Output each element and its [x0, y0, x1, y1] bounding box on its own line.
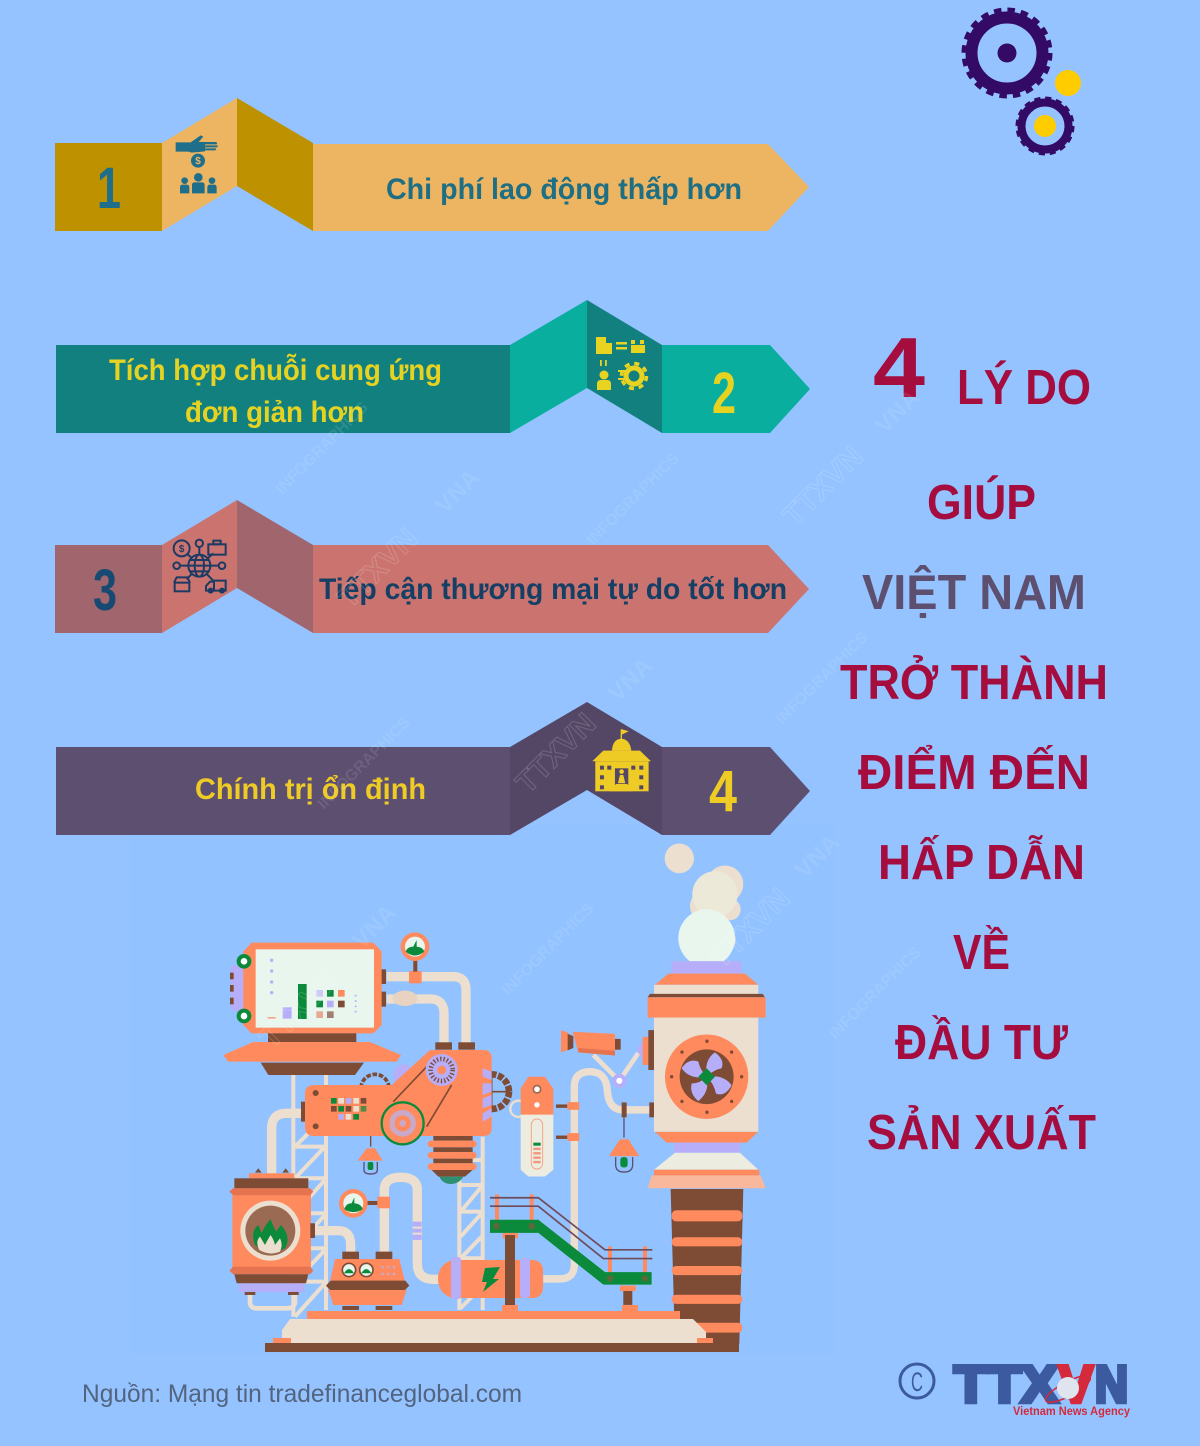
icon: gears	[965, 11, 1081, 153]
illustration: factory machine	[223, 844, 766, 1352]
title: 4 reasons: GIÚP	[927, 475, 1036, 530]
copyright symbol	[900, 1364, 934, 1398]
arm lamp	[358, 1136, 383, 1174]
text: political stability: Chính trị ổn định	[195, 773, 426, 806]
title: 4 reasons: HẤP DẪN	[878, 836, 1085, 890]
number 1: 1	[97, 156, 121, 221]
icon: global trade network: $	[179, 544, 185, 555]
icon: hand, coin and people: $	[195, 156, 201, 167]
pipe with camera	[543, 1072, 650, 1279]
press stack	[428, 1136, 477, 1184]
number 4: 4	[709, 759, 737, 824]
watermarks: INFOGRAPHICS	[773, 629, 872, 728]
furnace	[229, 1168, 315, 1308]
watermarks: INFOGRAPHICS	[315, 714, 414, 813]
watermarks: TTXVN	[332, 522, 424, 615]
panel: reason 1 ribbon	[55, 98, 809, 231]
copyright symbol: C	[911, 1367, 923, 1397]
security camera	[561, 1030, 621, 1055]
machine arm	[305, 1050, 492, 1144]
watermarks	[254, 384, 925, 1055]
title: 4 reasons: VIỆT NAM	[862, 565, 1086, 620]
title: 4 reasons: LÝ DO	[957, 361, 1091, 415]
panel: reason 2 ribbon	[56, 300, 810, 433]
logo: TTXVN: TTX	[954, 1356, 1058, 1414]
watermarks: INFOGRAPHICS	[826, 944, 925, 1043]
number 3: 3	[93, 558, 117, 623]
panel: reason 3 ribbon	[55, 500, 809, 633]
gears behind arm	[361, 1074, 389, 1102]
title: 4 reasons: ĐẦU TƯ	[895, 1016, 1068, 1070]
icon: hand, coin and people	[176, 135, 218, 193]
logo: TTXVN: N	[1095, 1356, 1128, 1414]
watermarks: TTXVN	[704, 882, 796, 975]
lattice towers	[293, 1075, 483, 1317]
battery tank	[438, 1235, 638, 1311]
icon: government building	[592, 729, 651, 791]
left machinery	[223, 932, 510, 1317]
factory base	[265, 1311, 739, 1352]
top gauge	[401, 932, 429, 972]
icon: supply chain	[596, 337, 646, 390]
fan	[665, 1034, 748, 1119]
right machinery	[490, 844, 766, 1344]
watermarks: VNA	[347, 899, 402, 954]
control box	[326, 1252, 409, 1310]
watermarks: INFOGRAPHICS	[273, 399, 372, 498]
hanging lamp	[609, 1117, 639, 1172]
gauge column	[510, 1077, 579, 1176]
watermarks: INFOGRAPHICS	[499, 900, 598, 999]
text: simpler supply chain	[109, 353, 442, 429]
icon: global trade network	[173, 540, 226, 593]
stairs	[490, 1194, 652, 1285]
title: 4 reasons	[840, 321, 1108, 1160]
panel: reason 4 ribbon	[56, 702, 810, 835]
logo: TTXVN: V	[1059, 1356, 1093, 1414]
watermarks: VNA	[870, 384, 925, 439]
watermarks: INFOGRAPHICS	[584, 450, 683, 549]
title: 4 reasons: TRỞ THÀNH	[840, 655, 1108, 710]
pipes	[272, 977, 466, 1279]
text: free trade access: Tiếp cận thương mại tự do tốt hơn	[319, 573, 787, 606]
watermarks: TTXVN	[254, 962, 346, 1055]
logo: TTXVN	[900, 1356, 1131, 1418]
text: simpler supply chain: đơn giản hơn	[185, 396, 364, 429]
watermarks: VNA	[603, 652, 658, 707]
watermarks: VNA	[430, 464, 485, 519]
support post	[505, 1237, 515, 1305]
chimney tower	[643, 961, 766, 1344]
source line: Nguồn: Mạng tin tradefinanceglobal.com	[82, 1380, 522, 1408]
number 2: 2	[712, 361, 736, 426]
lower gauge	[339, 1189, 390, 1218]
title: 4 reasons: ĐIỂM ĐẾN	[858, 745, 1090, 800]
text: simpler supply chain: Tích hợp chuỗi cung ứng	[109, 353, 442, 387]
title: 4 reasons: SẢN XUẤT	[867, 1105, 1096, 1160]
watermarks: TTXVN	[777, 440, 869, 533]
watermarks: VNA	[790, 829, 845, 884]
logo: TTXVN: Vietnam News Agency	[1013, 1406, 1131, 1418]
watermarks: TTXVN	[510, 707, 602, 800]
text: low labour cost: Chi phí lao động thấp hơn	[386, 173, 742, 206]
smoke	[665, 844, 743, 967]
big numeral 4: 4	[873, 321, 925, 416]
title: 4 reasons: VỀ	[953, 926, 1010, 980]
monitor	[223, 943, 401, 1075]
